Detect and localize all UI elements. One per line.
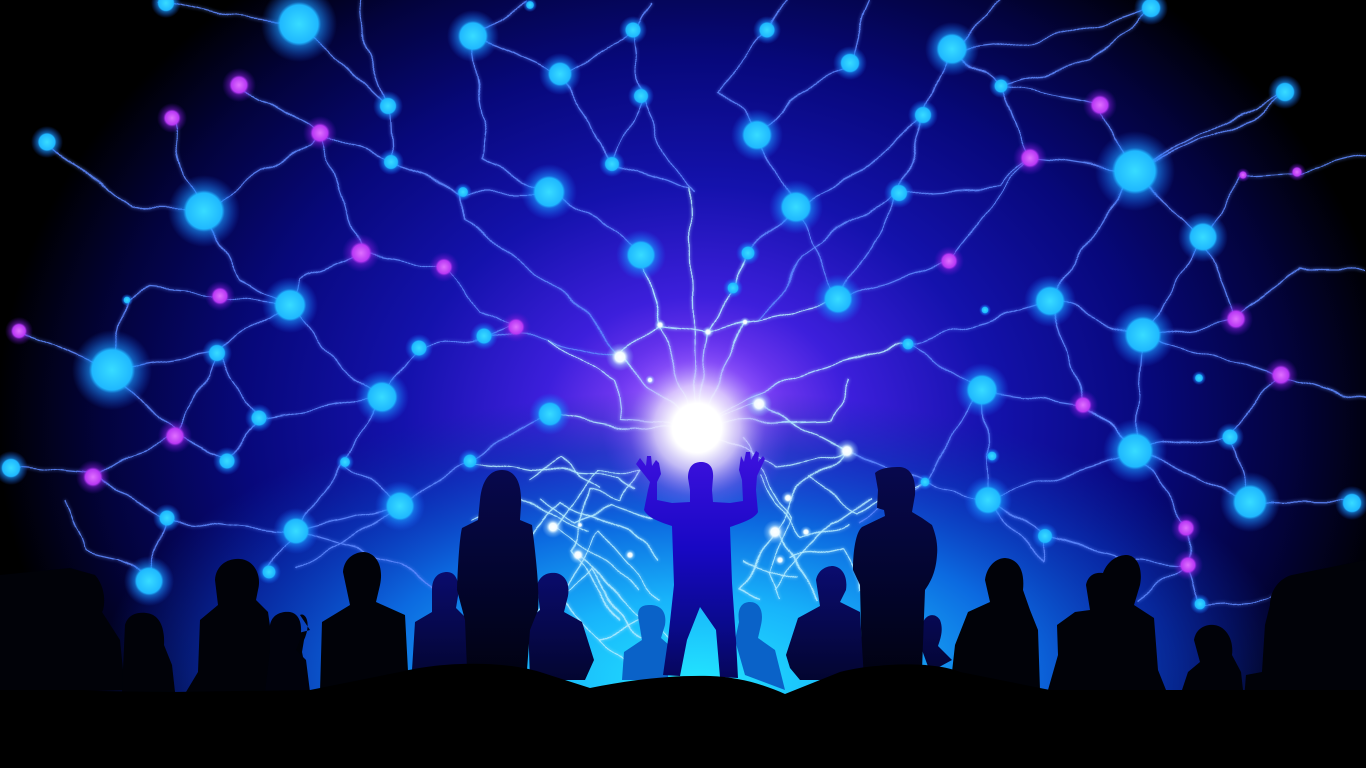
mid-ground person right of centre (786, 566, 864, 680)
white sparkle nodes (542, 317, 859, 566)
central light burst (602, 333, 792, 523)
central figure with raised arms (636, 451, 765, 678)
central filaments (470, 190, 925, 680)
far left crowd silhouettes (0, 552, 409, 692)
man silhouette on right (853, 467, 937, 670)
faint background people (622, 602, 785, 690)
left-centre mid-ground people (412, 572, 952, 680)
cyan network nodes (0, 0, 1366, 614)
woman silhouette (457, 470, 538, 670)
purple network nodes (5, 68, 1306, 580)
foreground ground mounds (0, 664, 1366, 768)
right crowd silhouettes (950, 555, 1366, 700)
child silhouette on left (265, 612, 310, 692)
network connection lines (11, 0, 1366, 604)
